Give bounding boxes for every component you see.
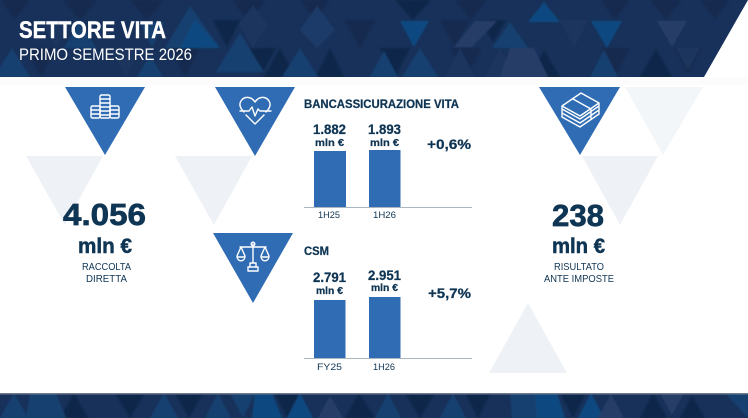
header banner — [0, 0, 748, 77]
bar chart: 1.882 — [313, 122, 346, 137]
panel: risultato ante imposte — [539, 87, 620, 285]
faint background triangles — [0, 77, 748, 373]
label — [82, 261, 131, 285]
icon: banknote stack on blue triangle — [539, 87, 620, 155]
value: 238 — [552, 198, 604, 233]
bar chart: 1H26 — [373, 210, 396, 221]
heading: BANCASSICURAZIONE VITA — [304, 97, 459, 111]
panel: bancassicurazione vita — [215, 87, 472, 221]
label: DIRETTA — [86, 273, 127, 285]
bar chart — [304, 122, 472, 221]
bar chart: 1H26 — [373, 362, 395, 373]
label: RACCOLTA — [82, 261, 131, 273]
icon: heart with pulse on blue triangle — [215, 87, 295, 156]
bar chart: 2.791 — [313, 270, 346, 285]
value: 4.056 — [63, 197, 146, 232]
panel: raccolta diretta — [63, 87, 146, 285]
icon: scales on blue triangle — [213, 233, 293, 303]
bar chart: mln € — [316, 285, 343, 297]
bar chart — [304, 268, 472, 373]
bar chart: mln € — [370, 137, 399, 149]
icon: coins on blue triangle — [65, 87, 145, 155]
label — [544, 261, 614, 285]
label: ANTE IMPOSTE — [544, 273, 614, 285]
bar chart: 1H25 — [318, 210, 340, 221]
unit: mln € — [552, 235, 605, 258]
footer band — [0, 393, 748, 418]
change percentage: +5,7% — [428, 286, 471, 301]
unit: mln € — [78, 235, 132, 258]
panel: csm — [213, 233, 472, 373]
bar chart: 1.893 — [368, 122, 401, 137]
subtitle: PRIMO SEMESTRE 2026 — [19, 46, 192, 64]
bar chart: FY25 — [317, 362, 342, 373]
label: RISULTATO — [554, 261, 604, 273]
change percentage: +0,6% — [427, 137, 471, 152]
heading: CSM — [304, 244, 329, 258]
bar chart: mln € — [371, 282, 398, 294]
bar chart: mln € — [315, 137, 344, 149]
bar chart: 2.951 — [368, 268, 401, 283]
title: SETTORE VITA — [19, 17, 166, 44]
